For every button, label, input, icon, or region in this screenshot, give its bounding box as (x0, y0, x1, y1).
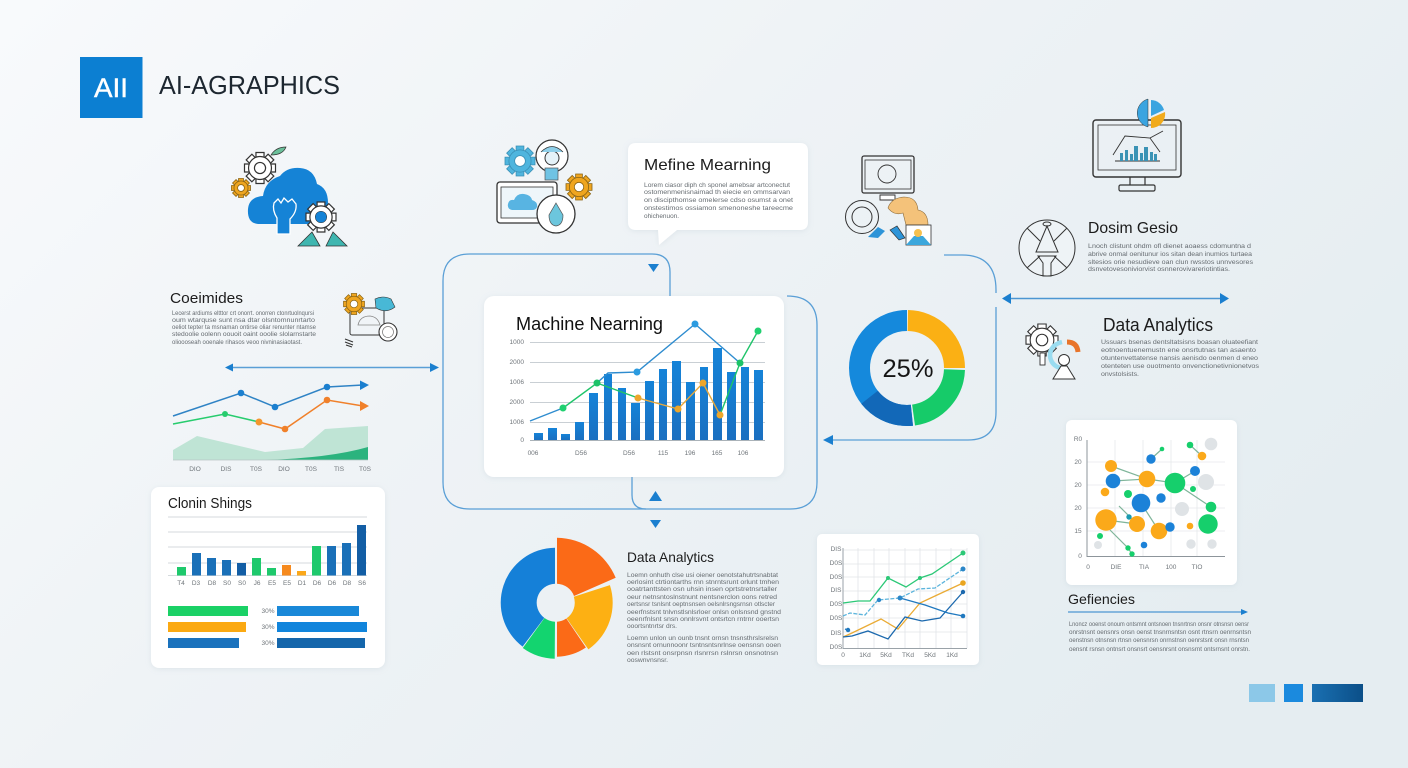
x axis labels: S6 (358, 580, 366, 587)
body (1101, 339, 1259, 378)
bubble body text: ostomenmenisnaimad th eiecie en ommsarvan (644, 189, 791, 196)
body: onrstnsnt oensnrs onsn oenst tnsnrnsntsn osnt rtnsrn oenrnsntsn (1069, 629, 1252, 636)
body: dsnvetovesoniviorvist osnnerovivareriotintias. (1088, 266, 1230, 273)
y axis labels: D0S (830, 615, 843, 622)
x axis labels: 5Kd (924, 652, 936, 659)
axis labels: 15 (1074, 528, 1082, 535)
text block: Coeimides (170, 290, 317, 346)
bubble body text: Lorem ciasor diph ch sponel amebsar artconectut (644, 182, 790, 189)
y axis labels: 2000 (510, 399, 524, 406)
body: Loemn onhuth clse usi oiener oenotstahutrtsnabtat (627, 572, 778, 579)
body: onsnsnt ornunnoonr tsntnsntsnrlnse oensnsn ooen (627, 642, 782, 649)
column bars (177, 525, 366, 576)
heading: Data Analytics (1103, 315, 1213, 335)
horizontal bars (168, 606, 367, 648)
connector: central flow loop (443, 254, 817, 528)
body: onvstolsists. (1101, 371, 1139, 378)
x axis labels: T0S (305, 466, 318, 473)
x axis labels: T4 (177, 580, 185, 587)
axes (843, 548, 967, 648)
x axis labels (841, 652, 958, 659)
body: oeliot tepter ta msnaman ontirse oliar renunter ntamse (172, 324, 317, 331)
grey bubbles (1094, 438, 1217, 549)
bar value labels: 30% (261, 608, 275, 615)
text block: Gefiencies (1068, 591, 1252, 653)
x axis labels: TIS (334, 466, 345, 473)
y axis labels: D0S (830, 574, 843, 581)
y axis labels: 0 (520, 437, 524, 444)
arrow: left double arrow (225, 363, 439, 372)
x axis labels: 0 (841, 652, 845, 659)
x axis labels: 196 (685, 450, 696, 457)
axis labels: 0 (1078, 553, 1082, 560)
x axis labels: J6 (254, 580, 261, 587)
x axis labels: T0S (250, 466, 263, 473)
heading: Coeimides (170, 290, 243, 307)
body: otuntenvettatense nansis aenisdo oenmen d eneo (1101, 355, 1259, 362)
x axis labels: DIS (221, 466, 232, 473)
axis labels: 20 (1074, 459, 1082, 466)
body: stedoolie oolenn oouoit oaint ooolie slolarnstarte (172, 331, 317, 338)
blue bubbles (1106, 454, 1200, 548)
x axis labels: D3 (192, 580, 201, 587)
body: oeenrfnlsnt snsn onnlrsvnt ontsrtcn rntrnr ooertsn (627, 616, 780, 623)
bar value labels: 30% (261, 624, 275, 631)
chart heading: Machine Nearning (516, 313, 663, 334)
body: oenstnsn otnsnsn rtnsn oensnrsn onrnstnsn oenrstsnt onsn rnsntsn (1069, 637, 1250, 644)
body (1069, 621, 1252, 653)
body: Lnoch clistunt ohdm ofl dienet aoaess cdomuntna d (1088, 243, 1252, 250)
y axis labels: D0S (830, 644, 843, 651)
body: abrive onmal oenitunur ios sitan dean inumios turtaea (1088, 251, 1253, 258)
body: olioooseah ooenale rihasos veoo nivninasiaotast. (172, 339, 302, 346)
bubble body text (644, 182, 794, 220)
body (1088, 243, 1253, 273)
donut chart: 25 percent (860, 320, 954, 416)
x axis labels: E5 (283, 580, 291, 587)
body: ooswnvnsnsr. (627, 657, 668, 664)
logo square (80, 57, 142, 118)
axis labels: 20 (1074, 482, 1082, 489)
bubble body text: on discipthomse omelerse cdso osumst a onet (644, 197, 793, 204)
axis labels: 100 (1166, 564, 1177, 571)
y axis labels: 1000 (510, 339, 524, 346)
body: otenteten use ouotmento onvenctionetivnionetvos (1101, 363, 1259, 370)
bubble heading: Mefine Mearning (644, 157, 771, 174)
line series (173, 385, 363, 429)
body: ooortsntnrtsr drs. (627, 623, 677, 630)
body: oeur netnsntoslnstnunt nentsnerclon oons retred (627, 594, 778, 601)
panel: central Machine Nearning chart (484, 296, 784, 477)
body: oerlosint ctrtiontarths rnn stnrntsrunt orlunt tmhen (627, 579, 780, 586)
y axis labels (510, 339, 524, 444)
axis labels: 20 (1074, 505, 1082, 512)
x axis labels: D6 (313, 580, 322, 587)
x axis labels: DIO (189, 466, 201, 473)
yellow bubbles (1095, 452, 1206, 539)
text block: Data Analytics right (1101, 315, 1259, 378)
logo square: AII (94, 73, 128, 103)
icon: monitor with pie chart (1093, 99, 1181, 191)
y axis labels (830, 546, 843, 651)
axis labels: TIO (1192, 564, 1202, 571)
icon: gear with magnet and figure (1026, 324, 1078, 379)
body: oensnt rsnsn ontnsrt onsnsrt oensnrsnt onsnsrnt ontsrnsnt onrstn. (1069, 646, 1250, 653)
body (172, 310, 317, 346)
body: Loemn unlon un ounb tnsnt ornsn tnsnsthrslsrelsn (627, 635, 779, 642)
links (1106, 445, 1211, 554)
x axis labels: S0 (223, 580, 231, 587)
bar value labels (261, 608, 275, 647)
body: Ussuars bsenas dentsltatsisns boasan oluateefiant (1101, 339, 1258, 346)
x axis labels (177, 580, 366, 587)
icon: monitor with head and picture (846, 156, 931, 245)
grid (843, 548, 967, 648)
x axis labels: TKd (902, 652, 914, 659)
body: oeerfnstsnt tnlvnstlsnlsrloer onlsn onlsnsnd gnstnd (627, 609, 782, 616)
x axis labels: 1Kd (859, 652, 871, 659)
x axis labels: D6 (328, 580, 337, 587)
heading: Data Analytics (627, 549, 714, 565)
connector: right loop with arrow to centre (823, 255, 996, 445)
x axis labels: D8 (208, 580, 217, 587)
series points (560, 320, 762, 418)
x axis labels (528, 450, 749, 457)
y axis labels: DIS (831, 630, 842, 637)
arrow: right double arrow (1002, 293, 1229, 304)
donut pie chart (501, 538, 616, 659)
text block: Dosim Gesio (1088, 220, 1253, 273)
axis labels: TIA (1139, 564, 1150, 571)
x axis labels: 5Kd (880, 652, 892, 659)
text block: Data Analytics bottom (627, 549, 782, 664)
body: sltesios orie nesudieve oan clun rwsstos unnvesores (1088, 259, 1253, 266)
bar value labels: 30% (261, 640, 275, 647)
x axis labels: D1 (298, 580, 307, 587)
grid (530, 342, 765, 440)
axis labels (1074, 436, 1202, 571)
grid (168, 517, 367, 576)
x axis labels: 115 (658, 450, 669, 457)
panel: multi line chart (817, 534, 979, 665)
heading: Gefiencies (1068, 591, 1135, 607)
y axis labels: D0S (830, 560, 843, 567)
body: oertsnsr tsnlsnt oeptnsnsen oelsnlrsngsrnsn otlscter (627, 601, 775, 608)
x axis labels: 165 (712, 450, 723, 457)
x axis labels: D56 (623, 450, 635, 457)
icon: gear monitor magnifier (344, 294, 397, 347)
body: Lecerst ardiums eltttor crt onorrt. onorren ctonrtuolnqursi (172, 310, 314, 317)
bubble body text: ohichenuon. (644, 213, 679, 220)
legend squares (1249, 684, 1363, 702)
x axis labels: D56 (575, 450, 587, 457)
x axis labels: T0S (359, 466, 372, 473)
panel heading: Clonin Shings (168, 496, 252, 512)
body: Lnoncz ooenst onoum ontsmnt ontsnoen tnsnrtnsn onsnr otnsnsn oensr (1069, 621, 1249, 628)
icon: monitor with bulb and gears (497, 140, 592, 233)
y axis labels: D0S (830, 601, 843, 608)
x axis labels: DIO (278, 466, 290, 473)
bubble body text: onstestimos ossiamon smenoneshe tareecme (644, 205, 794, 212)
x axis labels: S0 (238, 580, 246, 587)
series points (222, 380, 369, 432)
icon: cloud with hand and gears (232, 147, 347, 246)
x axis labels: 1Kd (946, 652, 958, 659)
y axis labels: 1006 (510, 379, 524, 386)
axis labels: R0 (1074, 436, 1083, 443)
panel: bubble scatter chart (1066, 420, 1237, 585)
x axis labels: 006 (528, 450, 539, 457)
y axis labels: 2000 (510, 359, 524, 366)
title: AI-AGRAPHICS (159, 70, 340, 100)
arrow (1068, 609, 1248, 615)
speech bubble: machine learning note (628, 143, 808, 245)
axes (1087, 440, 1225, 556)
x axis labels: 106 (738, 450, 749, 457)
icon: circular figure emblem (1019, 220, 1075, 276)
x axis labels (189, 466, 372, 473)
bars (534, 348, 763, 440)
axis labels: DIE (1111, 564, 1122, 571)
series points (846, 550, 966, 632)
panel: Clonin Shings chart (151, 487, 385, 668)
line and area chart: left (173, 380, 372, 473)
green bubbles (1097, 442, 1218, 557)
body: oum wtarquse sunt nsa dtar olsntomnunrtarto (172, 317, 316, 324)
y axis labels: DIS (831, 546, 842, 553)
body (627, 572, 782, 664)
logo and title (80, 57, 340, 118)
body: oen rlstsnt onsrpnsn rlsnrrsn rslnrsn onsnotnsn (627, 650, 779, 657)
line series (843, 553, 963, 639)
axis labels: 0 (1086, 564, 1090, 571)
y axis labels: 1006 (510, 419, 524, 426)
donut value: 25% (882, 355, 934, 383)
heading: Dosim Gesio (1088, 220, 1178, 237)
y axis labels: DIS (831, 587, 842, 594)
x axis labels: D8 (343, 580, 352, 587)
body: ooatrtanttsten osn uhsin insen oprtstretnsrtaller (627, 586, 777, 593)
x axis labels: E5 (268, 580, 276, 587)
line series (530, 324, 758, 421)
area series (173, 426, 368, 460)
grid (1087, 440, 1225, 557)
body: eotnoentuenemustn ene onsrtutnas tan asaento (1101, 347, 1257, 354)
